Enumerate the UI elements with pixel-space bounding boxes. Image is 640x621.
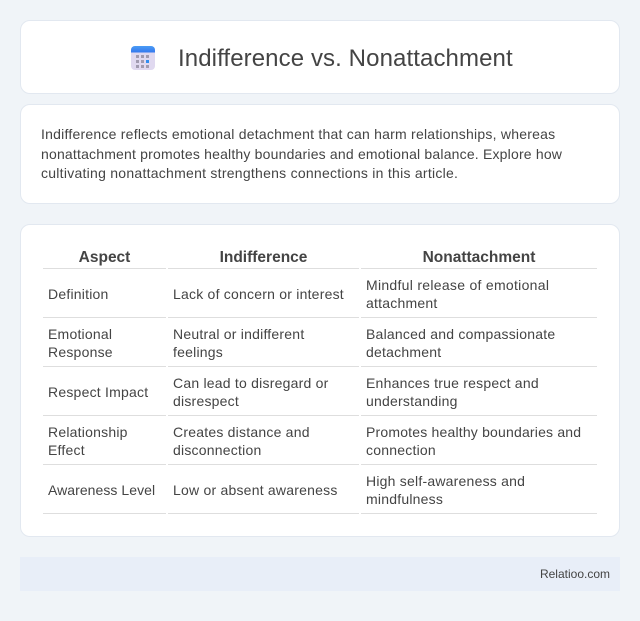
row: awareness level: mindfulness	[366, 491, 443, 507]
row: emotional response: Neutral or indifferent	[173, 326, 304, 342]
row: emotional response: Balanced and compassionate	[366, 326, 555, 342]
panel: comparison table	[20, 224, 620, 537]
row: emotional response: Emotional	[48, 326, 112, 342]
intro paragraph: nonattachment promotes healthy boundaries and emotional balance. Explore how	[41, 146, 562, 162]
row: respect impact: understanding	[366, 393, 458, 409]
row: awareness level: High self-awareness and	[366, 473, 525, 489]
row: relationship effect: Promotes healthy boundaries and	[366, 424, 581, 440]
row: relationship effect: disconnection	[173, 442, 261, 458]
row: emotional response: feelings	[173, 344, 223, 360]
row: awareness level: Awareness Level	[48, 482, 155, 498]
table header: Aspect	[79, 249, 130, 266]
row: relationship effect	[43, 424, 597, 465]
row: respect impact: Can lead to disregard or	[173, 375, 328, 391]
row: relationship effect: Relationship	[48, 424, 128, 440]
row: respect impact: Respect Impact	[48, 384, 148, 400]
row: awareness level	[43, 473, 597, 514]
footer brand: Relatioo.com	[540, 567, 610, 581]
table header: Indifference	[220, 249, 307, 266]
row: definition	[43, 277, 597, 318]
row: awareness level: Low or absent awareness	[173, 482, 338, 498]
intro paragraph: cultivating nonattachment strengthens connections in this article.	[41, 165, 458, 181]
icon: calendar	[131, 46, 155, 70]
title: Indifference vs. Nonattachment	[178, 45, 513, 72]
table header	[43, 249, 597, 269]
row: respect impact: disrespect	[173, 393, 239, 409]
row: relationship effect: Creates distance and	[173, 424, 310, 440]
panel: title card	[20, 20, 620, 94]
row: definition: attachment	[366, 295, 437, 311]
row: respect impact	[43, 375, 597, 416]
table header: Nonattachment	[423, 249, 535, 266]
row: emotional response: detachment	[366, 344, 441, 360]
row: respect impact: Enhances true respect and	[366, 375, 539, 391]
footer bar	[20, 557, 620, 591]
row: relationship effect: connection	[366, 442, 436, 458]
row: definition: Lack of concern or interest	[173, 286, 344, 302]
row: emotional response	[43, 326, 597, 367]
panel: intro text	[20, 104, 620, 204]
row: emotional response: Response	[48, 344, 113, 360]
row: definition: Mindful release of emotional	[366, 277, 549, 293]
row: relationship effect: Effect	[48, 442, 85, 458]
intro paragraph	[41, 126, 562, 181]
intro paragraph: Indifference reflects emotional detachment that can harm relationships, whereas	[41, 126, 555, 142]
row: definition: Definition	[48, 286, 109, 302]
